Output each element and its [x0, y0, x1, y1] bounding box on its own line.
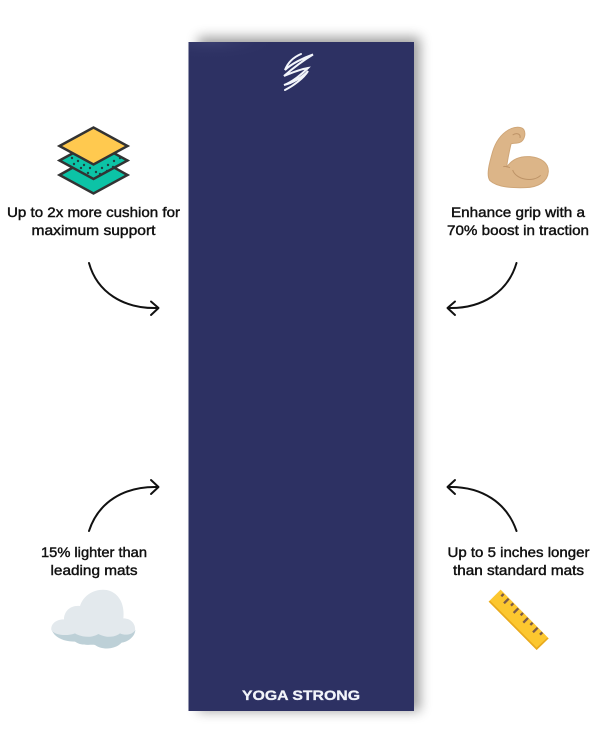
logo wordmark: YOGA STRONG [242, 687, 360, 703]
feature: lighter: leading mats [50, 562, 138, 578]
icon: layers [60, 128, 128, 194]
arrow: lighter to mat [89, 480, 158, 531]
text: longer: Up to 5 inches longer [448, 544, 590, 560]
icon: mat logo scribble [284, 54, 313, 90]
mat shadow [198, 37, 420, 711]
feature: longer: than standard mats [453, 562, 584, 578]
yoga mat [188, 42, 414, 711]
icon: cloud [51, 590, 135, 648]
text: grip: Enhance grip with a [451, 204, 585, 220]
feature: grip [447, 127, 589, 238]
feature: grip: 70% boost in traction [447, 222, 589, 238]
arrow: longer to mat [448, 480, 516, 531]
feature: longer [448, 544, 590, 650]
icon: ruler [489, 590, 549, 650]
feature: lighter [41, 544, 147, 648]
text: lighter: 15% lighter than [41, 544, 147, 560]
arrow: grip to mat [448, 263, 516, 315]
text: cushion: Up to 2x more cushion for [7, 204, 180, 220]
arrow: cushion to mat [89, 263, 158, 315]
icon: flexed bicep [488, 127, 548, 188]
feature: cushion [7, 128, 180, 238]
feature: cushion: maximum support [32, 222, 156, 238]
